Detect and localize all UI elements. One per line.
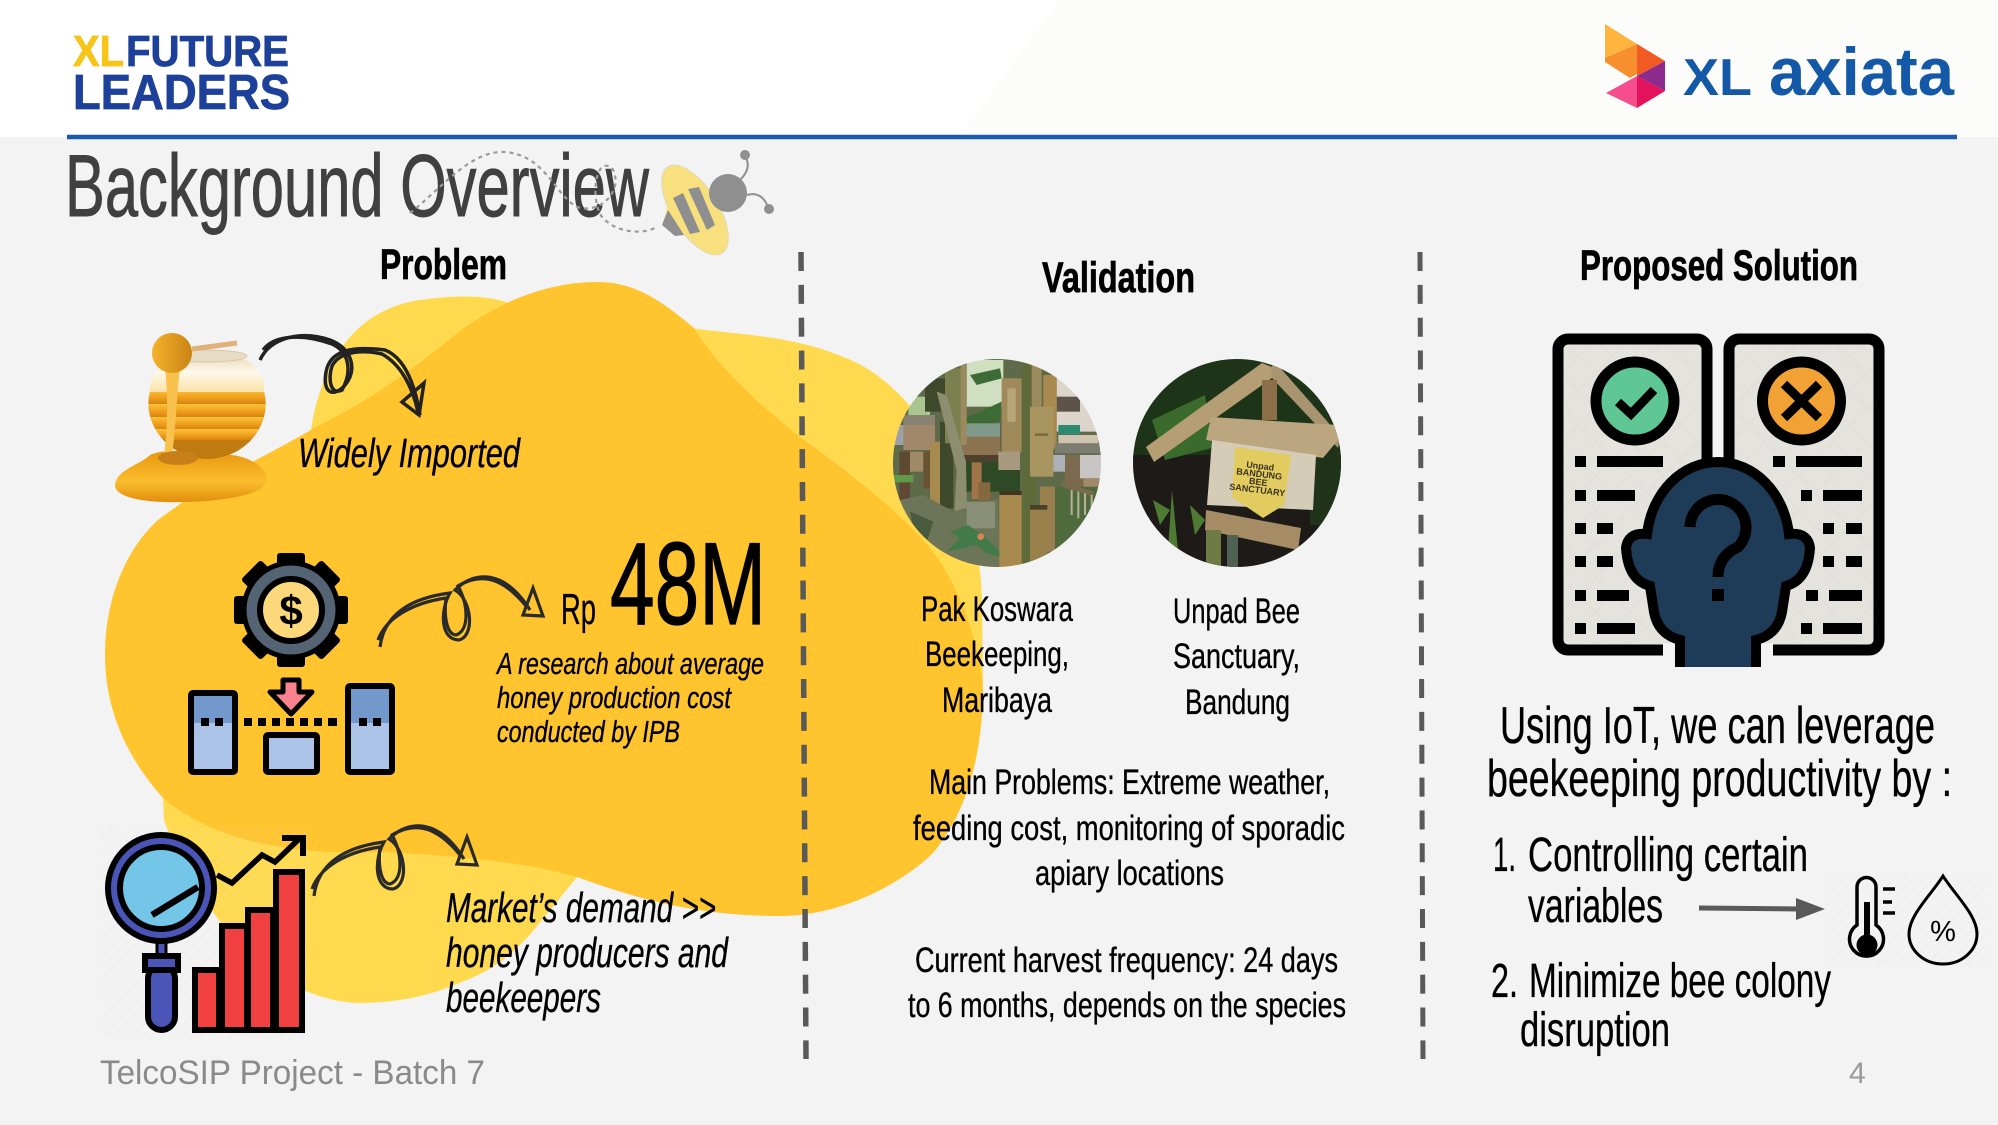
header band [0,0,1998,137]
caption: Unpad: Unpad Bee [1173,592,1300,631]
arrow: to 48M [378,577,543,647]
icon: gear and cost comparison: $ [279,587,303,634]
stat: Rp 48M: Rp [561,585,596,634]
text: market demand: honey producers and [446,929,729,976]
caption: Unpad: Sanctuary, [1173,637,1300,676]
icon: honey jar [115,333,275,502]
sign text: BANDUNG [1236,466,1283,482]
icon: person weighing options [1558,339,1879,667]
list item: controlling variables: variables [1528,880,1663,933]
list item: controlling variables: 1. [1493,829,1516,882]
caption: Pak Koswara: Beekeeping, [925,635,1069,674]
icon: bee with dashed flight path [410,150,774,265]
heading: proposed solution: Proposed Solution [1580,242,1858,290]
arrow: to market demand [312,826,477,896]
caption: Pak Koswara: Pak Koswara [921,590,1073,629]
logo: XL Future Leaders: LEADERS [73,66,290,120]
divider: right [1420,252,1423,1059]
icon: humidity drop [1909,876,1977,964]
sign text: Unpad [1246,459,1275,473]
icon: temperature and humidity [1826,875,1988,965]
icon: gear and cost comparison [191,553,392,772]
footer label: TelcoSIP Project - Batch 7 [100,1054,485,1092]
list item: bee colony: disruption [1520,1004,1670,1057]
logo: XL Future Leaders: XL [73,27,124,76]
light yellow blob [163,297,983,1003]
caption: Pak Koswara: Maribaya [942,681,1052,720]
text: harvest frequency: Current harvest frequency: 24 days [915,941,1338,980]
text: market demand [446,884,729,1021]
list item: controlling variables: Controlling certain [1528,829,1808,882]
sign text: SANCTUARY [1229,482,1286,498]
icon: thermometer [1850,878,1895,956]
icon: check [1596,362,1674,440]
icon: logo mark [1605,24,1665,108]
logo: XL Axiata [1605,24,1955,110]
page number: 4 [1849,1057,1866,1090]
text: widely imported: Widely Imported [298,430,521,476]
stat: Rp 48M [561,518,766,649]
text: main problems: Main Problems: Extreme weather, [929,763,1330,802]
text: research note: conducted by IPB [497,714,680,749]
caption: Unpad: Bandung [1185,683,1290,722]
arrow: to sensor icons [1699,898,1825,920]
text: research note [495,646,764,749]
stat: Rp 48M: 48M [610,518,766,649]
icon: magnifier and rising bars [100,827,309,1039]
panel: validation [890,254,1346,1025]
panel: proposed solution [1487,242,1988,1057]
panel: problem [100,241,766,1039]
text: research note: honey production cost [497,680,732,715]
divider: left [801,252,806,1059]
text: main problems: feeding cost, monitoring of sporadic [913,809,1345,848]
list item: controlling variables [1493,829,1808,933]
list item: bee colony [1491,955,1831,1057]
caption: Unpad [1173,592,1300,722]
arrow: to widely imported [260,336,424,415]
heading: validation: Validation [1042,254,1195,302]
list item: bee colony: 2. [1491,955,1518,1008]
icon: humidity drop: % [1930,916,1956,948]
text: research note: A research about average [495,646,764,681]
text: IoT statement [1487,697,1952,808]
photo: Unpad bee sanctuary [1133,359,1341,570]
list item: bee colony: Minimize bee colony [1529,955,1831,1008]
heading: problem: Problem [380,241,507,289]
text: market demand: Market’s demand >> [446,884,716,931]
text: harvest frequency [908,941,1346,1025]
logo: XL Axiata: XL [1683,49,1752,107]
sign text: BEE [1248,476,1268,488]
text: main problems [913,763,1345,893]
photo: Pak Koswara beekeeping [890,355,1105,570]
text: market demand: beekeepers [446,974,601,1021]
icon: cross [1762,362,1840,440]
logo: XL Future Leaders: FUTURE [126,27,289,76]
text: main problems: apiary locations [1035,854,1224,893]
caption: Pak Koswara [921,590,1073,720]
logo: XL Future Leaders [73,27,290,120]
title: Background Overview [65,136,649,235]
text: harvest frequency: to 6 months, depends on the species [908,986,1346,1025]
dark yellow blob [105,282,983,916]
logo: XL Axiata: axiata [1769,34,1955,110]
